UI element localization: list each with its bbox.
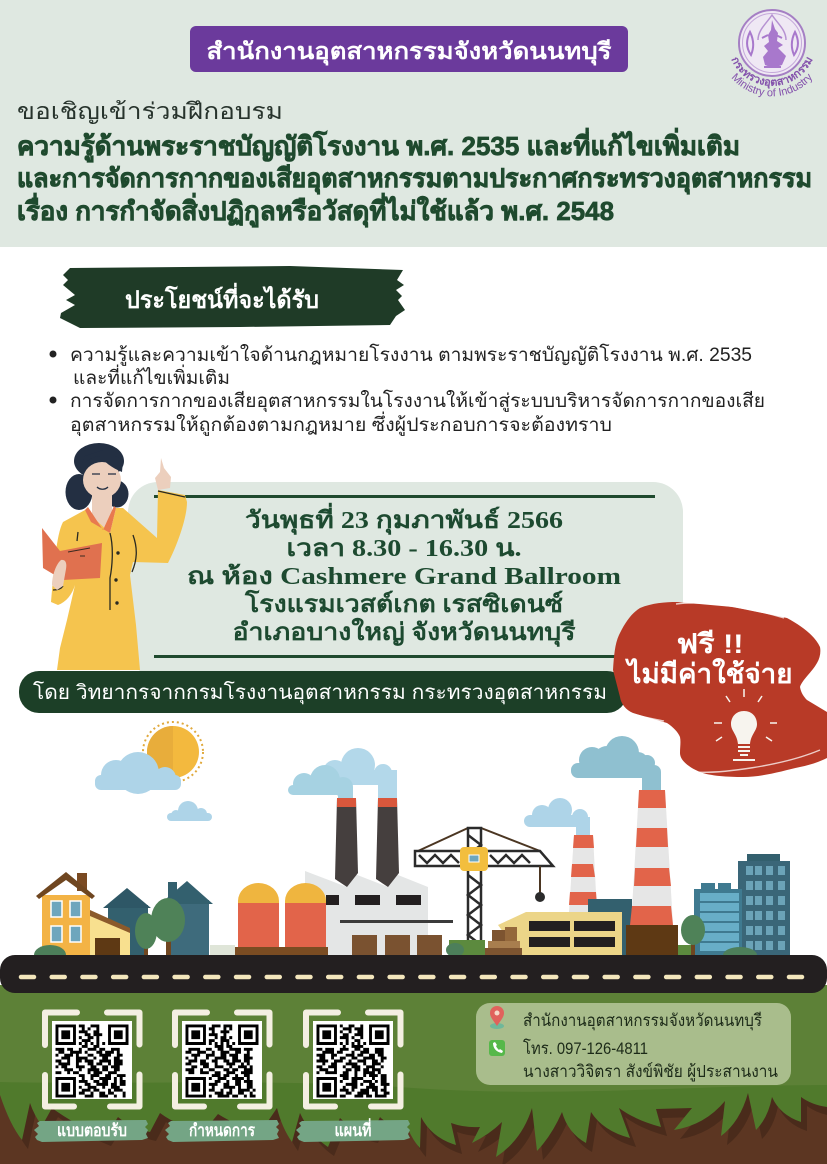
illustration: small chimney <box>524 798 597 912</box>
callout: free of charge: ไม่มีค่าใช้จ่าย <box>624 658 792 689</box>
illustration: warehouse and bricks <box>446 912 622 957</box>
text block: benefits list: และที่แก้ไขเพิ่มเติม <box>73 364 230 389</box>
ground: grass and soil <box>0 985 827 1164</box>
illustration: factory <box>288 748 453 955</box>
QR code: response form <box>45 1012 140 1106</box>
icon: ministry logo: กระทรวงอุตสาหกรรม <box>731 57 813 89</box>
speaker pill <box>19 671 627 713</box>
training title: ความรู้ด้านพระราชบัญญัติโรงงาน พ.ศ. 2535 และที่แก้ไขเพิ่มเติม <box>17 127 740 163</box>
panel: date and venue <box>128 482 683 677</box>
venue text: เวลา 8.30 - 16.30 น. <box>286 536 522 562</box>
illustration: tall chimney <box>571 736 678 955</box>
icon: ministry logo <box>731 9 813 98</box>
contact text: โทร. 097-126-4811 <box>523 1038 648 1058</box>
text block: benefits list: ความรู้และความเข้าใจด้านกฎหมายโรงงาน ตามพระราชบัญญัติโรงงาน พ.ศ. 2535 <box>70 343 752 366</box>
text block: benefits list: การจัดการกากของเสียอุตสาหกรรมในโรงงานให้เข้าสู่ระบบบริหารจัดการกากของเสีย <box>70 389 765 413</box>
training title: เรื่อง การกำจัดสิ่งปฏิกูลหรือวัสดุที่ไม่ใช้แล้ว พ.ศ. 2548 <box>17 192 614 228</box>
panel: contact <box>476 1003 791 1085</box>
icon: light bulb <box>714 689 777 760</box>
illustration: crane <box>415 828 553 955</box>
icon: ministry logo: Ministry of Industry <box>732 73 812 98</box>
label: schedule: กำหนดการ <box>189 1121 256 1140</box>
venue text <box>187 502 621 648</box>
text block: benefits list <box>50 343 765 437</box>
label: response form <box>34 1120 148 1142</box>
illustration: office towers <box>678 854 790 963</box>
QR code: schedule <box>175 1012 270 1106</box>
venue text: อำเภอบางใหญ่ จังหวัดนนทบุรี <box>232 617 576 648</box>
icon: location pin <box>490 1006 504 1029</box>
icon: phone <box>489 1040 505 1056</box>
callout: free of charge: ฟรี !! <box>676 629 744 659</box>
illustration: teacher <box>42 443 187 670</box>
venue text: วันพุธที่ 23 กุมภาพันธ์ 2566 <box>245 502 563 536</box>
illustration: sun and clouds <box>95 722 212 821</box>
label: schedule <box>165 1120 279 1142</box>
contact text <box>523 1011 778 1082</box>
speaker pill: โดย วิทยากรจากกรมโรงงานอุตสาหกรรม กระทรวงอุตสาหกรรม <box>33 681 607 705</box>
venue text: โรงแรมเวสต์เกต เรสซิเดนซ์ <box>244 589 563 618</box>
contact text: สำนักงานอุตสาหกรรมจังหวัดนนทบุรี <box>523 1011 762 1031</box>
training title <box>17 127 812 228</box>
illustration: houses and trees <box>34 872 235 965</box>
QR code: map <box>306 1012 400 1106</box>
label: map <box>296 1118 410 1142</box>
illustration: storage tanks <box>235 883 328 955</box>
heading: benefits banner: ประโยชน์ที่จะได้รับ <box>125 282 319 314</box>
organisation badge <box>190 26 628 72</box>
contact text: นางสาววิจิตรา สังข์พิชัย ผู้ประสานงาน <box>523 1062 778 1082</box>
organisation badge: สำนักงานอุตสาหกรรมจังหวัดนนทบุรี <box>206 38 612 66</box>
training title: และการจัดการกากของเสียอุตสาหกรรมตามประกาศกระทรวงอุตสาหกรรม <box>17 163 812 195</box>
label: response form: แบบตอบรับ <box>57 1121 127 1140</box>
callout: free of charge <box>613 602 827 777</box>
venue text: ณ ห้อง Cashmere Grand Ballroom <box>187 563 621 590</box>
label: map: แผนที่ <box>334 1118 372 1140</box>
heading: benefits banner <box>60 266 405 328</box>
invitation line: ขอเชิญเข้าร่วมฝึกอบรม <box>17 98 283 124</box>
text block: benefits list: อุตสาหกรรมให้ถูกต้องตามกฎหมาย ซึ่งผู้ประกอบการจะต้องทราบ <box>70 411 612 437</box>
road <box>0 955 827 993</box>
panel: header <box>0 0 827 247</box>
